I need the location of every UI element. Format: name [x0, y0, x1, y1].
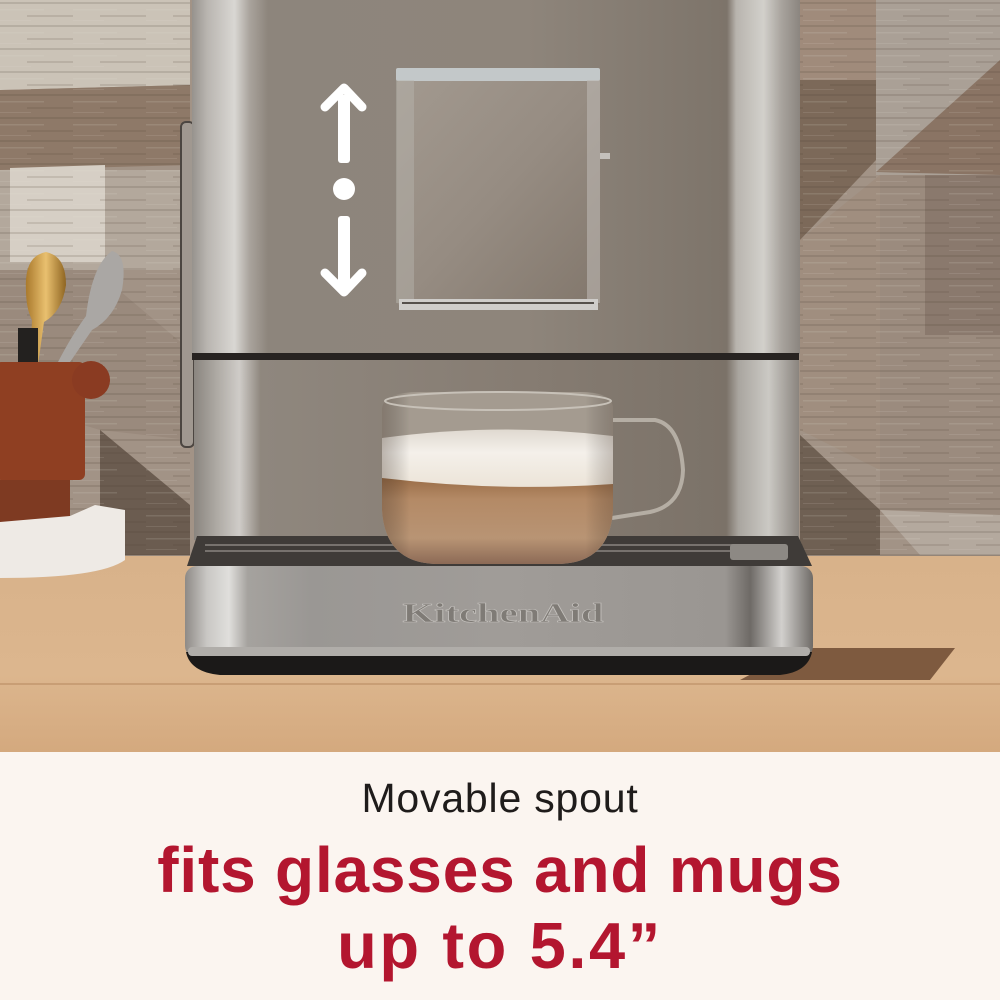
arrow up	[325, 88, 362, 163]
tray foot	[186, 652, 812, 675]
glass mug of latte	[382, 392, 683, 564]
headline	[157, 834, 843, 982]
lower body	[194, 360, 799, 540]
center dot	[333, 178, 355, 200]
drip tray top	[187, 536, 812, 566]
side handle	[181, 122, 194, 447]
upper body	[192, 0, 800, 354]
subtitle: Movable spout	[361, 775, 639, 821]
product photo scene	[0, 0, 1000, 752]
headline: up to 5.4”	[337, 909, 663, 982]
coffee machine	[185, 0, 813, 675]
countertop	[0, 556, 1000, 752]
drip tray front	[185, 566, 813, 658]
headline: fits glasses and mugs	[157, 834, 843, 906]
utensil holder	[0, 251, 125, 578]
arrow down	[325, 216, 362, 292]
caption panel	[0, 752, 1000, 1000]
arrows up and down	[325, 88, 362, 292]
brand emboss: KitchenAid	[402, 598, 604, 628]
wall background	[0, 0, 1000, 560]
spout	[396, 68, 610, 310]
